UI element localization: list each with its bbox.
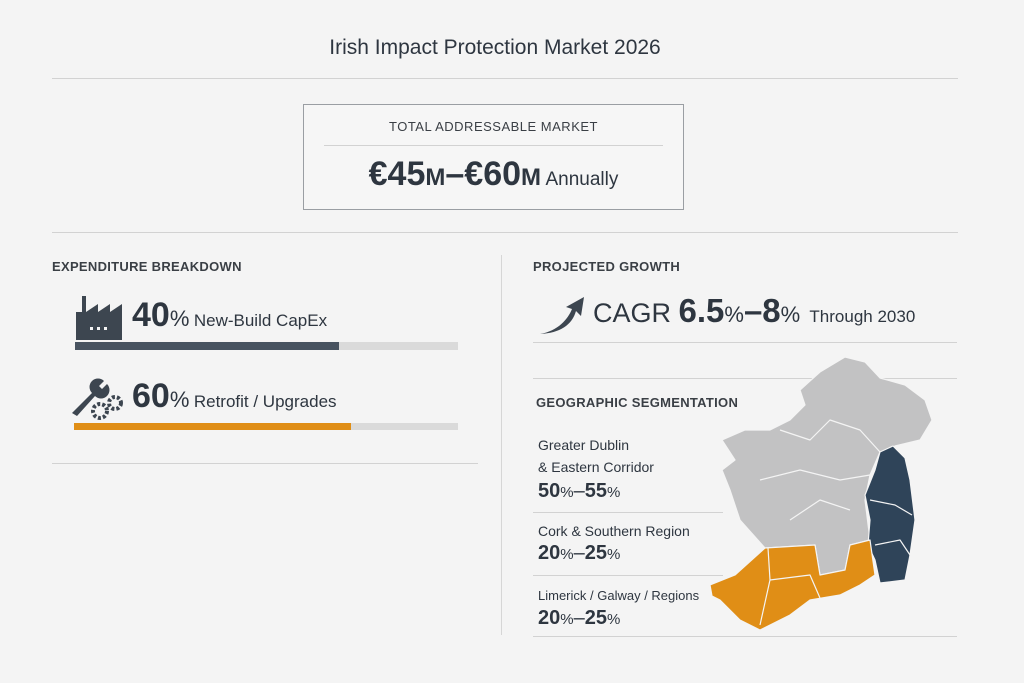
row: new-build capex [75,296,458,350]
segment: dublin: Greater Dublin [538,437,629,453]
heading: geographic segmentation: GEOGRAPHIC SEGMENTATION [536,395,738,410]
icon: arrow up [540,297,584,334]
title: Irish Impact Protection Market 2026 [329,36,661,59]
callout: total addressable market [303,104,684,210]
segment: limerick galway: Limerick / Galway / Regions [538,588,699,603]
segment: cork: 20%–25% [538,542,620,564]
callout value: €45M–€60M Annually [369,155,618,193]
icon: wrench and gears [72,378,123,420]
value: 60% Retrofit / Upgrades [132,377,337,415]
callout heading: TOTAL ADDRESSABLE MARKET [389,119,598,134]
heading: projected growth: PROJECTED GROWTH [533,259,680,274]
bar [74,423,458,430]
icon: factory [76,296,122,340]
segment: dublin: & Eastern Corridor [538,459,654,475]
bar [75,342,458,350]
heading: expenditure breakdown: EXPENDITURE BREAKDOWN [52,259,242,274]
segment: cork [538,523,690,564]
segment: limerick galway: 20%–25% [538,607,620,629]
segment: dublin: 50%–55% [538,480,620,502]
segment: limerick galway [538,588,699,629]
segment: dublin [538,437,654,502]
segment: cork: Cork & Southern Region [538,523,690,539]
map: ireland [710,358,932,630]
growth metric: CAGR 6.5%–8% Through 2030 [593,292,915,329]
row: retrofit [72,377,458,430]
value: 40% New-Build CapEx [132,296,327,334]
